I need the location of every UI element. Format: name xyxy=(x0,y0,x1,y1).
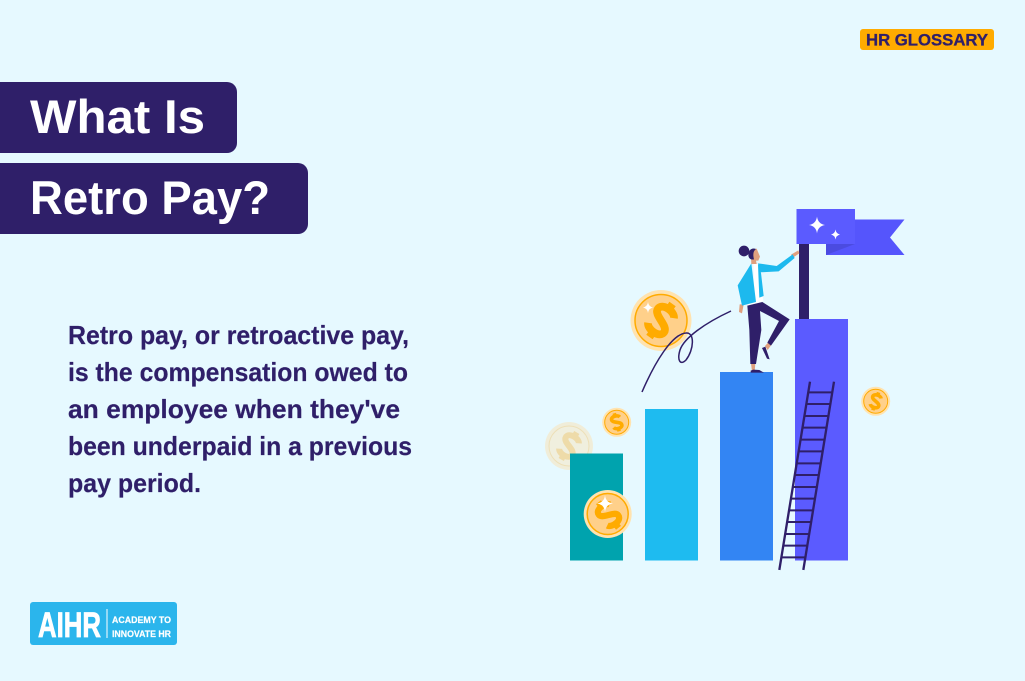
badge: HR Glossary: HR GLOSSARY xyxy=(866,32,988,50)
title line: Retro Pay? xyxy=(0,163,308,234)
coin: front of teal bar xyxy=(584,490,632,538)
ladder xyxy=(779,382,834,570)
icon: sparkles xyxy=(809,216,840,240)
jacket and arm xyxy=(738,254,795,306)
flag pole xyxy=(799,240,809,320)
curved motion line xyxy=(642,311,731,392)
bar: teal xyxy=(570,454,623,560)
logo: AIHR: ACADEMY TO xyxy=(112,615,171,626)
coin: small right xyxy=(861,387,890,416)
hair xyxy=(739,246,756,259)
coin: large xyxy=(630,290,692,351)
coin: small left xyxy=(602,408,631,437)
title line: What Is: What Is xyxy=(30,90,205,143)
logo: AIHR: INNOVATE HR xyxy=(112,629,171,640)
logo: AIHR: AIHR xyxy=(38,606,101,645)
skin xyxy=(739,249,799,371)
title line: What Is xyxy=(0,82,237,153)
coin: faded xyxy=(545,422,593,470)
climber figure xyxy=(738,246,799,373)
bar: blue xyxy=(720,372,773,560)
white shirt xyxy=(747,264,763,306)
logo: AIHR xyxy=(30,602,177,645)
bar: light blue xyxy=(645,409,698,560)
definition text: an employee when they've xyxy=(68,394,400,424)
definition text: pay period. xyxy=(68,468,201,498)
title xyxy=(0,82,308,234)
flag xyxy=(796,209,904,255)
definition text: been underpaid in a previous xyxy=(68,431,412,461)
shoes xyxy=(751,347,770,373)
definition text: is the compensation owed to xyxy=(68,357,408,387)
illustration: rising bars with climber xyxy=(545,209,904,570)
trousers xyxy=(747,302,790,364)
definition text: Retro pay, or retroactive pay, xyxy=(68,320,409,350)
title line: Retro Pay?: Retro Pay? xyxy=(30,171,270,224)
bar: purple xyxy=(795,319,848,560)
definition text xyxy=(68,320,412,498)
